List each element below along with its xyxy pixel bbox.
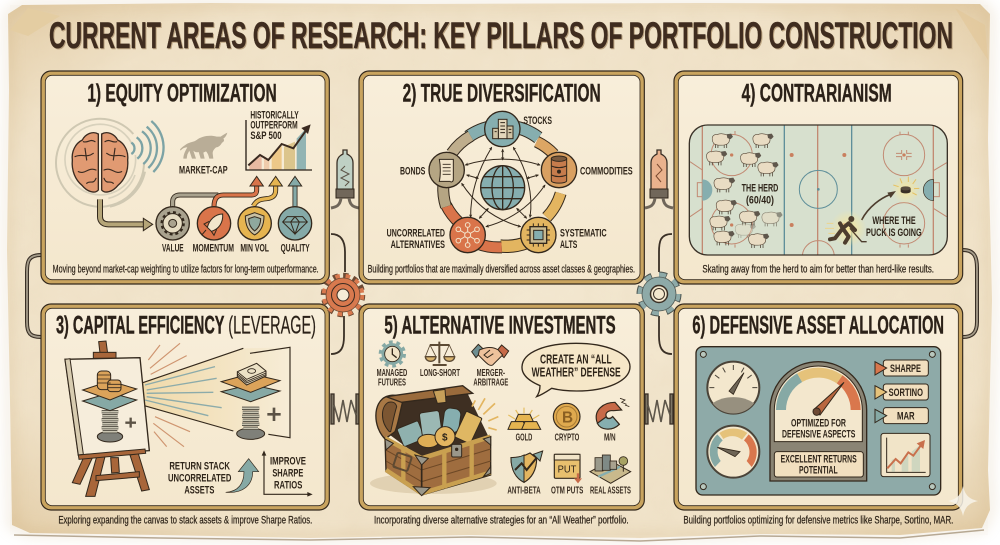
icon: systematic alts chip bbox=[521, 217, 556, 253]
sparkle watermark bbox=[948, 486, 978, 516]
icon: left asset stack bbox=[83, 371, 137, 442]
label: return stack: UNCORRELATED bbox=[168, 472, 231, 484]
right pipe bbox=[963, 250, 977, 337]
labels: strategies bbox=[377, 368, 509, 388]
gauge: main dial: OPTIMIZED FOR bbox=[791, 418, 846, 430]
gauge: main dial: POTENTIAL bbox=[799, 464, 838, 476]
callout: all weather: CREATE AN “ALL bbox=[540, 352, 612, 366]
heading: 5) ALTERNATIVE INVESTMENTS bbox=[384, 312, 616, 339]
icon: stocks bbox=[485, 111, 520, 147]
labels: factors: VALUE bbox=[162, 243, 184, 255]
label: where the puck is going: PUCK IS GOING bbox=[866, 227, 922, 239]
label: where the puck is going bbox=[866, 215, 922, 239]
arrow: to puck bbox=[862, 191, 896, 220]
label: the herd bbox=[742, 183, 778, 207]
ring of arrows bbox=[443, 126, 561, 247]
labels: strategies: MERGER- bbox=[477, 368, 505, 379]
label: where the puck is going: WHERE THE bbox=[872, 215, 916, 227]
labels: strategies: ARBITRAGE bbox=[473, 377, 509, 388]
left vacuum tube bbox=[331, 150, 359, 208]
labels: asset classes: UNCORRELATED bbox=[387, 228, 445, 240]
icon: real assets bbox=[590, 455, 631, 483]
right vacuum tube bbox=[645, 150, 673, 208]
heading: 2) TRUE DIVERSIFICATION bbox=[403, 81, 601, 108]
heading: 3) CAPITAL EFFICIENCY (LEVERAGE) bbox=[56, 312, 316, 339]
icon: uncorrelated alternatives network bbox=[450, 217, 485, 253]
labels: factors bbox=[162, 243, 310, 255]
arrow: brain to factors bbox=[100, 199, 153, 231]
labels: strategies: LONG-SHORT bbox=[420, 368, 460, 379]
caption: Moving beyond market-cap weighting to utilize factors for long-term outperformance. bbox=[53, 264, 319, 276]
connectors between panels bbox=[27, 150, 977, 424]
labels: row one bbox=[516, 433, 616, 444]
label: return stack bbox=[168, 460, 231, 496]
panel: 6 defensive asset allocation bbox=[674, 304, 963, 526]
labels: asset classes bbox=[387, 115, 633, 251]
icon: quality diamond bbox=[278, 207, 312, 240]
thin correlation arrows bbox=[462, 147, 545, 227]
icon: puck with rays bbox=[892, 176, 920, 204]
heading: 1) EQUITY OPTIMIZATION bbox=[87, 81, 277, 108]
labels: strategies: FUTURES bbox=[378, 377, 406, 388]
chart: outperformance: S&P 500 bbox=[250, 130, 282, 142]
metric tags: SHARPE bbox=[890, 363, 921, 375]
labels: asset classes: STOCKS bbox=[523, 115, 552, 127]
panel: 3 capital efficiency bbox=[41, 304, 329, 526]
labels: row two: OTM PUTS bbox=[551, 485, 584, 496]
gauge: main dial: EXCELLENT RETURNS bbox=[781, 454, 857, 466]
caption: Exploring expanding the canvas to stack assets & improve Sharpe Ratios. bbox=[58, 514, 312, 526]
icon: brain with signal waves bbox=[56, 119, 164, 207]
icon: otm puts: PUT bbox=[558, 464, 576, 475]
icon: value gear bbox=[156, 207, 189, 240]
labels: factors: MOMENTUM bbox=[193, 243, 234, 255]
labels: row one: GOLD bbox=[516, 433, 532, 444]
icon: otm puts bbox=[554, 454, 582, 483]
icon: orange gear bbox=[324, 276, 362, 314]
hockey rink bbox=[688, 124, 948, 256]
labels: row two bbox=[507, 485, 631, 496]
icon: easel and canvas bbox=[65, 341, 149, 496]
control board bbox=[696, 347, 941, 495]
light beam with rays bbox=[136, 343, 290, 447]
icon: treasure chest bbox=[370, 386, 498, 496]
icon: bonds scroll bbox=[429, 152, 464, 188]
metric tags: SORTINO bbox=[889, 387, 923, 399]
label: return stack: ASSETS bbox=[184, 484, 215, 496]
icon: momentum rocket bbox=[197, 207, 231, 240]
gauge: main dial bbox=[770, 362, 867, 481]
labels: asset classes: BONDS bbox=[400, 166, 426, 178]
axes with improve sharpe ratios: IMPROVE bbox=[270, 455, 306, 467]
wires to gears bbox=[331, 234, 672, 354]
labels: factors: QUALITY bbox=[281, 243, 310, 255]
label: return stack: RETURN STACK bbox=[169, 460, 231, 472]
icon: gold bars bbox=[508, 408, 541, 429]
chart: outperformance: HISTORICALLY bbox=[250, 109, 299, 121]
panel: 4 contrarianism bbox=[674, 71, 963, 284]
labels: asset classes: SYSTEMATIC bbox=[560, 228, 607, 240]
gauge: lower left bbox=[707, 426, 759, 478]
sheep herd bbox=[707, 134, 783, 248]
labels: asset classes: ALTS bbox=[560, 239, 578, 251]
icon: commodities barrel bbox=[541, 152, 577, 188]
icon: bull bbox=[180, 133, 227, 159]
labels: row two: REAL ASSETS bbox=[590, 485, 631, 496]
caption: Building portfolios that are maximally diversified across asset classes & geographies. bbox=[368, 264, 635, 276]
icon: min vol shield bbox=[238, 207, 271, 240]
icon: grey-teal gear bbox=[640, 275, 678, 313]
icon: managed futures clock gear bbox=[381, 342, 404, 366]
panel: 1 equity optimization bbox=[41, 71, 329, 284]
icon: crypto coin: B bbox=[562, 409, 573, 426]
icon: anti-beta shield bbox=[511, 451, 543, 482]
icon: merger-arbitrage handshake bbox=[472, 344, 509, 365]
labels: strategies: MANAGED bbox=[377, 368, 407, 379]
axes with improve sharpe ratios bbox=[262, 450, 313, 497]
icon: right asset stack bbox=[221, 363, 280, 439]
labels: row one: M/N bbox=[604, 433, 616, 444]
metric tags bbox=[875, 360, 928, 424]
left pipe bbox=[27, 255, 41, 337]
label: market-cap: MARKET-CAP bbox=[179, 164, 228, 176]
icon: skater bbox=[825, 210, 867, 247]
heading: 4) CONTRARIANISM bbox=[742, 81, 892, 108]
labels: asset classes: ALTERNATIVES bbox=[391, 239, 445, 251]
label: the herd: THE HERD bbox=[742, 183, 778, 195]
chart: outperformance: OUTPERFORM bbox=[250, 120, 298, 132]
icon: treasure chest: $ bbox=[442, 433, 448, 444]
axes with improve sharpe ratios: RATIOS bbox=[274, 479, 303, 491]
gauge: main dial: DEFENSIVE ASPECTS bbox=[782, 429, 856, 441]
mini chart bbox=[881, 433, 930, 477]
metric tags: MAR bbox=[897, 411, 915, 423]
icon: globe bbox=[481, 166, 525, 210]
arrows: factors to chart bbox=[173, 176, 302, 207]
icon: magnet bbox=[596, 398, 629, 429]
panel: 5 alternative investments bbox=[359, 304, 644, 526]
arrow: curved up bbox=[226, 459, 259, 492]
labels: asset classes: COMMODITIES bbox=[580, 166, 633, 178]
chart: outperformance bbox=[246, 109, 312, 170]
plus sign bbox=[125, 418, 136, 428]
icon: crypto coin bbox=[553, 403, 580, 430]
icon: long-short scale bbox=[425, 342, 455, 365]
left spring bbox=[331, 394, 359, 424]
gauge: upper left bbox=[707, 362, 759, 414]
label: the herd: (60/40) bbox=[746, 195, 774, 207]
panel: 2 true diversification bbox=[359, 71, 644, 284]
callout: all weather: WEATHER” DEFENSE bbox=[532, 366, 621, 380]
right spring bbox=[645, 394, 673, 424]
labels: row two: ANTI-BETA bbox=[507, 485, 541, 496]
labels: row one: CRYPTO bbox=[555, 433, 579, 444]
axes with improve sharpe ratios: SHARPE bbox=[272, 468, 304, 480]
plus sign bbox=[267, 408, 281, 421]
callout: all weather bbox=[522, 343, 630, 397]
labels: factors: MIN VOL bbox=[240, 243, 269, 255]
caption: Incorporating diverse alternative strategies for an “All Weather” portfolio. bbox=[374, 514, 629, 526]
